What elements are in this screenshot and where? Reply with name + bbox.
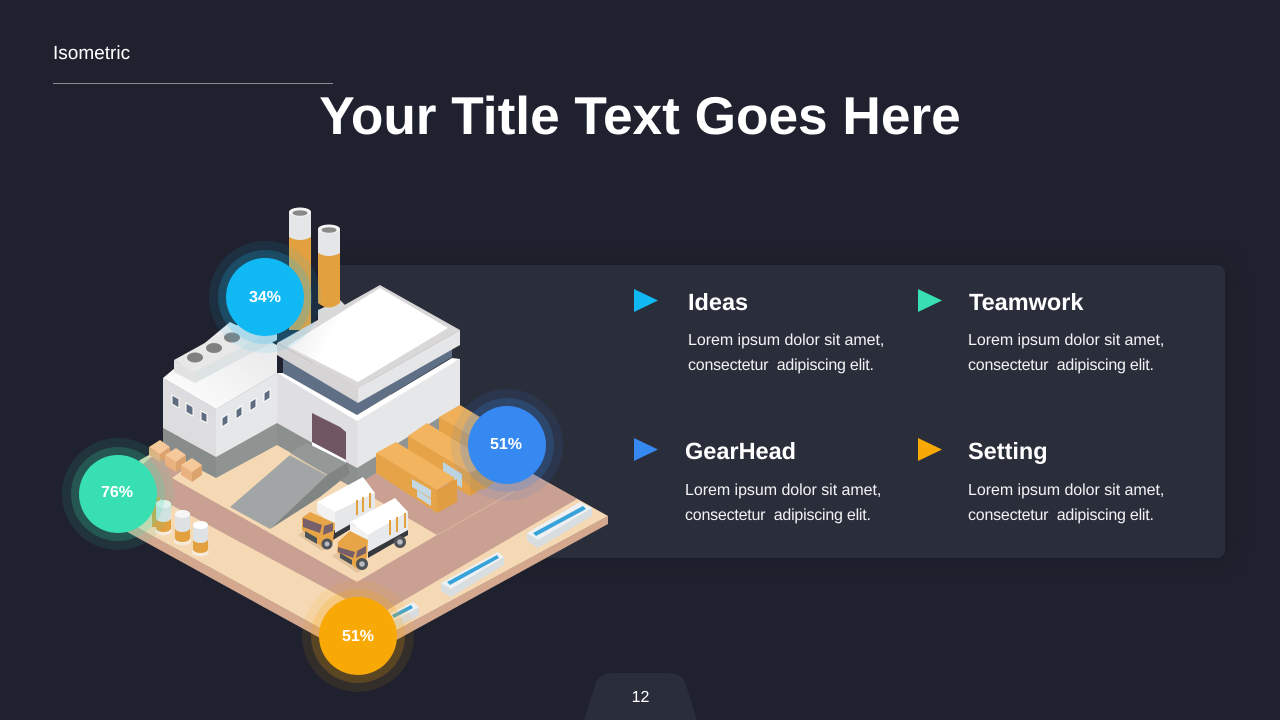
badge: 34%: 34% [249,289,281,306]
header label: Isometric [53,43,130,64]
header rule [53,83,333,84]
badge: 76% [62,438,174,550]
item: Setting [968,438,1164,524]
tanks [152,497,209,556]
containers [376,405,505,513]
large building [277,285,460,490]
arrow: Teamwork [918,289,942,312]
panel: background card [330,265,1225,558]
badge: 51% blue: 51% [490,436,522,453]
cargo boxes [149,440,202,482]
trucks [298,477,408,573]
item: GearHead: GearHead [685,438,796,464]
truck 2 [332,498,408,573]
item: Ideas: Ideas [688,289,748,315]
blue band [283,345,452,415]
sand lot [172,430,437,582]
door [312,413,346,460]
page number tab [584,673,697,720]
title: Your Title Text Goes Here [319,87,961,146]
container 1 [376,442,457,513]
item: GearHead [685,438,881,524]
roof slab [277,343,358,403]
item: Teamwork [968,289,1164,374]
arrow: Setting [918,438,942,461]
small building [163,318,277,478]
page number tab: 12 [632,689,649,706]
badge: 34% [209,241,321,353]
item: GearHead: Lorem ipsum dolor sit amet, consectetur adipiscing elit. [685,482,881,524]
planters [385,502,592,632]
item: Teamwork: Teamwork [969,289,1084,315]
badge: 51% orange: 51% [342,628,374,645]
container 3 [439,405,505,490]
windows [172,389,270,427]
container 2 [408,423,490,496]
arrow: GearHead [634,438,658,461]
item: Ideas: Lorem ipsum dolor sit amet, consectetur adipiscing elit. [688,332,884,374]
badge: 51% orange [302,580,414,692]
platform base [100,357,608,660]
item: Teamwork: Lorem ipsum dolor sit amet, consectetur adipiscing elit. [968,332,1164,374]
item: Ideas [688,289,884,374]
item: Setting: Lorem ipsum dolor sit amet, consectetur adipiscing elit. [968,482,1164,524]
ramp [230,443,350,529]
chimneys [289,208,360,330]
badge: 76%: 76% [101,484,133,501]
badge: 51% blue [451,389,563,501]
item: Setting: Setting [968,438,1048,464]
truck 1 [298,477,375,551]
pink road [125,360,577,616]
arrow: Ideas [634,289,658,312]
